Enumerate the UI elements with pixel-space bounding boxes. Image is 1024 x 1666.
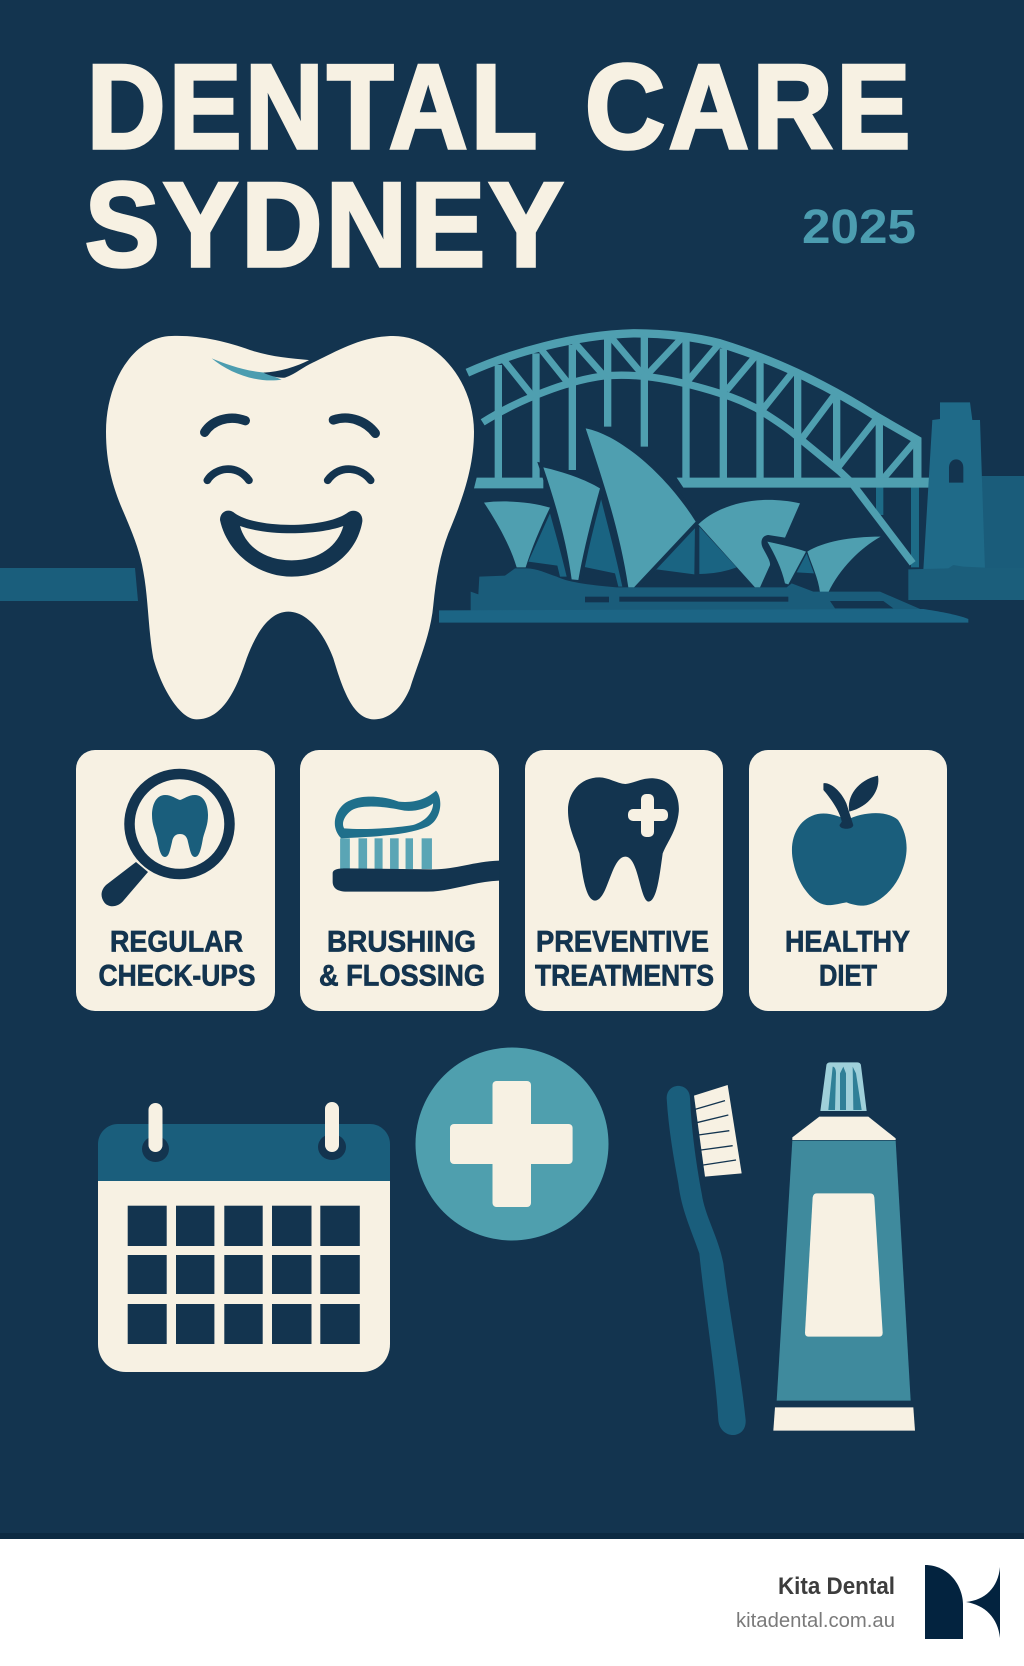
right eyebrow <box>333 418 375 433</box>
bridge deck <box>474 478 929 488</box>
tooth body <box>106 336 474 719</box>
tooth mascot <box>106 336 474 719</box>
verticals <box>498 337 879 480</box>
icon: toothbrush <box>667 1085 746 1435</box>
opera house platform <box>471 568 923 611</box>
mouth <box>220 511 362 577</box>
opera house sails <box>484 428 881 592</box>
date grid <box>128 1206 360 1344</box>
icon: toothbrush with paste <box>333 791 499 892</box>
icon: medical cross <box>416 1048 608 1240</box>
label <box>319 926 485 992</box>
icon: calendar <box>98 1102 390 1372</box>
tooth highlight <box>212 358 282 380</box>
card background <box>749 750 947 1011</box>
teeth inside mouth <box>240 526 343 560</box>
left eyebrow <box>205 418 245 432</box>
year: 2025 <box>802 201 916 254</box>
icon: apple <box>792 776 907 906</box>
platform slots <box>585 597 893 608</box>
title <box>85 40 914 292</box>
title: SYDNEY <box>85 158 567 292</box>
icon: tooth with cross <box>568 777 679 902</box>
footer <box>0 1533 1024 1666</box>
website: kitadental.com.au <box>736 1610 895 1632</box>
left eye <box>207 469 249 480</box>
brand name: Kita Dental <box>778 1573 895 1600</box>
left water band <box>0 568 138 601</box>
label <box>98 926 256 992</box>
card: regular check-ups <box>76 750 275 1011</box>
label: HEALTHY <box>785 926 910 958</box>
binder rings <box>142 1102 346 1162</box>
label: BRUSHING <box>327 926 476 958</box>
diagonals <box>505 340 913 477</box>
label: DIET <box>819 960 877 992</box>
label: & FLOSSING <box>319 960 485 992</box>
card background <box>300 750 499 1011</box>
harbour bridge <box>467 333 917 563</box>
lower chord <box>483 375 913 563</box>
footer background <box>0 1539 1024 1666</box>
label: TREATMENTS <box>535 960 714 992</box>
title: CARE <box>585 40 914 174</box>
right building <box>982 476 1024 571</box>
tower base <box>908 565 1024 600</box>
tower <box>923 402 985 570</box>
sydney skyline <box>439 333 1024 623</box>
label: REGULAR <box>110 926 243 958</box>
label: PREVENTIVE <box>536 926 709 958</box>
label <box>785 926 910 992</box>
card: brushing and flossing <box>300 750 499 1011</box>
tower window <box>949 459 963 483</box>
icon: magnifier <box>102 774 230 906</box>
calendar header <box>98 1124 390 1181</box>
footer shadow line <box>0 1533 1024 1539</box>
upper chord <box>467 333 917 480</box>
label <box>535 926 714 992</box>
under-deck pillars <box>876 487 919 567</box>
card background <box>76 750 275 1011</box>
card background <box>525 750 723 1011</box>
calendar body <box>98 1181 390 1372</box>
tooth notch shadow <box>263 360 313 378</box>
card: preventive treatments <box>525 750 723 1011</box>
right eye <box>328 469 371 480</box>
shoreline strip <box>439 609 968 623</box>
logo <box>925 1565 1000 1639</box>
icon: toothpaste tube <box>773 1062 915 1431</box>
label: CHECK-UPS <box>98 960 256 992</box>
title: DENTAL <box>87 40 541 174</box>
card: healthy diet <box>749 750 947 1011</box>
